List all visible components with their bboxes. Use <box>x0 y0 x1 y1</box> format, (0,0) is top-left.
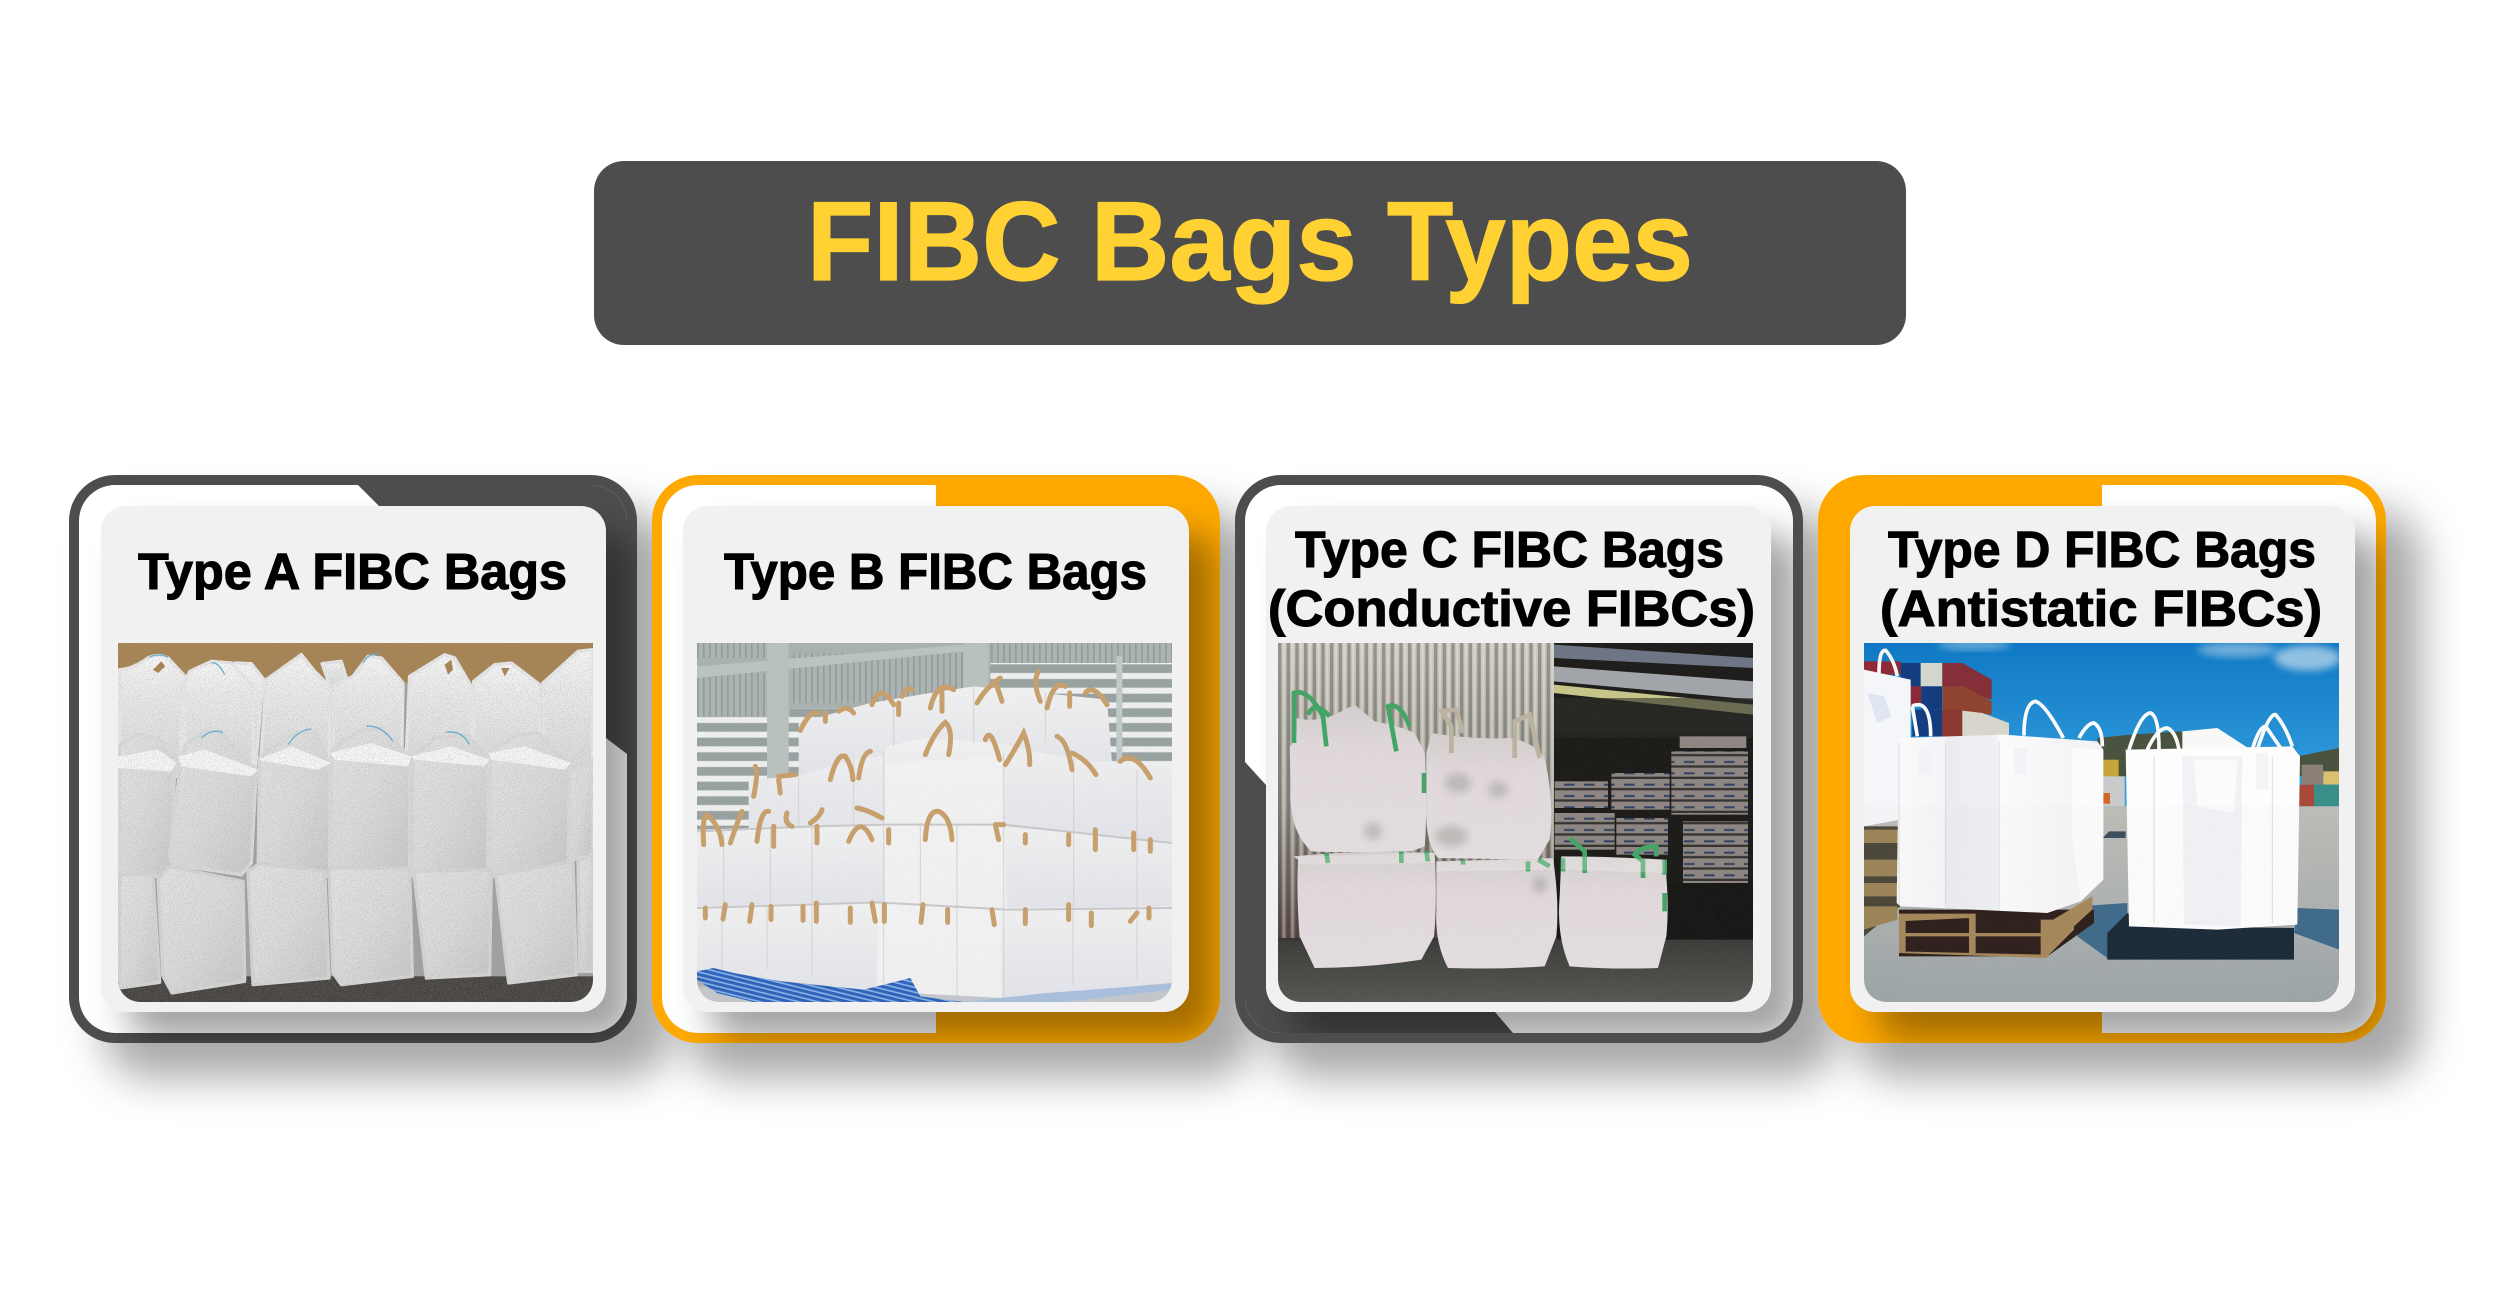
heading: Type A: Type A FIBC Bags <box>138 543 567 600</box>
photo: dusty bulk bags in warehouse <box>1278 643 1753 1002</box>
title text: FIBC Bags Types <box>807 179 1693 304</box>
heading: Type D: (Antistatic FIBCs) <box>1880 580 2322 637</box>
card frame C <box>1235 475 1803 1043</box>
heading: Type C <box>1268 521 1755 637</box>
photo: white bulk bags on pallets at container yard <box>1864 640 2341 1002</box>
heading: Type B: Type B FIBC Bags <box>724 543 1147 600</box>
card frame B <box>652 475 1220 1043</box>
heading: Type D <box>1880 521 2322 637</box>
panel: Type B FIBC Bags <box>652 475 1255 1078</box>
card frame D <box>1818 475 2386 1043</box>
photo: stacked white sacks <box>118 643 593 1002</box>
photo: warehouse pyramid of bulk bags <box>697 643 1172 1002</box>
card frame A <box>69 475 637 1043</box>
heading: Type D: Type D FIBC Bags <box>1888 521 2316 578</box>
panel: Type A FIBC Bags <box>69 475 672 1078</box>
heading: Type C: (Conductive FIBCs) <box>1268 580 1755 637</box>
heading: Type C: Type C FIBC Bags <box>1295 521 1724 578</box>
panel: Type D FIBC Bags (Antistatic FIBCs) <box>1818 475 2421 1078</box>
panel: Type C FIBC Bags (Conductive FIBCs) <box>1235 475 1838 1078</box>
title banner <box>594 161 1906 345</box>
